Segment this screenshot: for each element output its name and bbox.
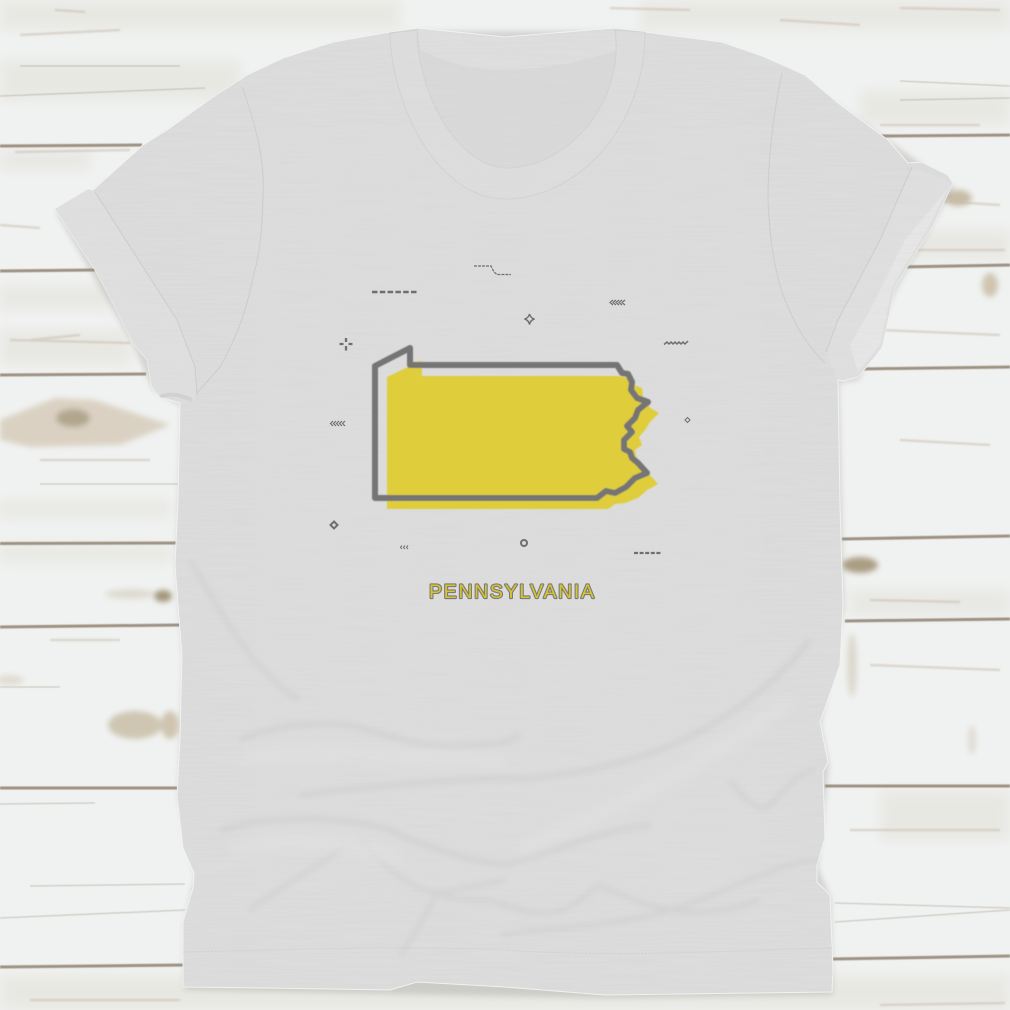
fabric highlights [230, 700, 790, 860]
fabric hem stitch [183, 948, 832, 953]
mark: dashed squiggle top [474, 266, 511, 274]
sleeve seams [95, 73, 912, 400]
title: PENNSYLVANIA [429, 581, 594, 603]
decorative marks around map [330, 266, 690, 553]
neck interior [417, 30, 616, 168]
mark: small diamond right [685, 418, 690, 422]
left rolled cuff [56, 189, 160, 396]
fabric folds: shadows [817, 858, 819, 864]
mark: chevrons top right [610, 300, 625, 305]
right rolled cuff [838, 183, 953, 380]
back collar [417, 30, 618, 70]
printed design: Pennsylvania map [375, 348, 659, 509]
mark: sparkle outline [524, 314, 534, 324]
mark: chevrons left [330, 421, 345, 426]
mark: plus cross [340, 338, 352, 350]
mark: chevrons bottom [400, 546, 408, 549]
mark: dashed line bottom right [634, 552, 661, 554]
front collar band [390, 30, 645, 199]
mark: zigzag line [664, 341, 688, 344]
grey state outline [375, 348, 648, 498]
mark: diamond bottom left [330, 522, 338, 528]
mark: dashed line top left [372, 291, 417, 293]
wood knots [0, 190, 998, 755]
right sleeve underside [850, 188, 948, 372]
mark: small circle [521, 540, 527, 546]
yellow offset state fill [387, 361, 659, 509]
